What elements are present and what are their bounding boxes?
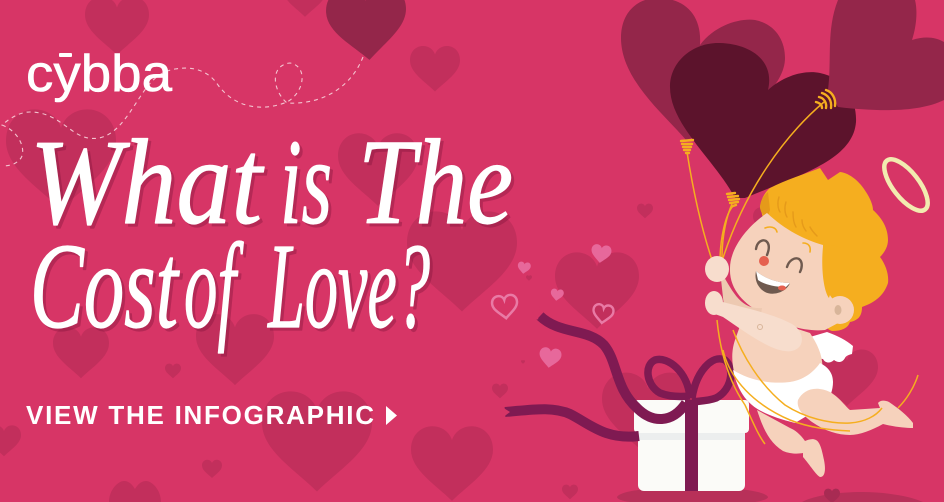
light pink hearts [517, 243, 612, 369]
ribbon tails [505, 316, 686, 437]
dashed flight path [2, 57, 363, 166]
belly button mark [758, 324, 762, 330]
title: of [184, 219, 244, 354]
hair sideburn [822, 246, 849, 298]
wing [810, 332, 853, 363]
cupid shadow [802, 492, 923, 502]
strings [687, 102, 918, 444]
hair strands [778, 197, 817, 236]
shaded upper arm [720, 270, 762, 320]
logo: cybba [26, 45, 172, 103]
face [730, 213, 840, 330]
title: Cost [30, 219, 180, 354]
title: The [358, 115, 513, 250]
title: What [30, 115, 265, 250]
gift shadow [617, 487, 768, 502]
gift box [634, 400, 749, 491]
front leg [798, 389, 913, 435]
darker hair left edge [760, 192, 770, 218]
hands [705, 256, 729, 315]
ear [826, 296, 854, 324]
mouth [755, 271, 790, 294]
outline hearts [491, 294, 614, 324]
title: is [280, 115, 332, 250]
arm [708, 298, 802, 351]
ribbon notches [502, 306, 540, 418]
halo [877, 153, 935, 217]
eyes [756, 240, 802, 272]
balloon knots [681, 90, 835, 206]
body [732, 312, 822, 392]
hair back [760, 168, 888, 331]
small heart on shadow [824, 489, 840, 502]
ribbon bow [648, 359, 731, 402]
nose [759, 256, 769, 266]
title: Love? [267, 219, 430, 354]
balloons [621, 0, 944, 198]
call to action: VIEW THE INFOGRAPHIC [26, 400, 374, 430]
cupid [687, 102, 918, 477]
diaper [733, 363, 833, 423]
back leg [757, 410, 825, 477]
eyebrows [765, 227, 810, 252]
title [30, 115, 513, 354]
dark balloon top [325, 0, 409, 63]
